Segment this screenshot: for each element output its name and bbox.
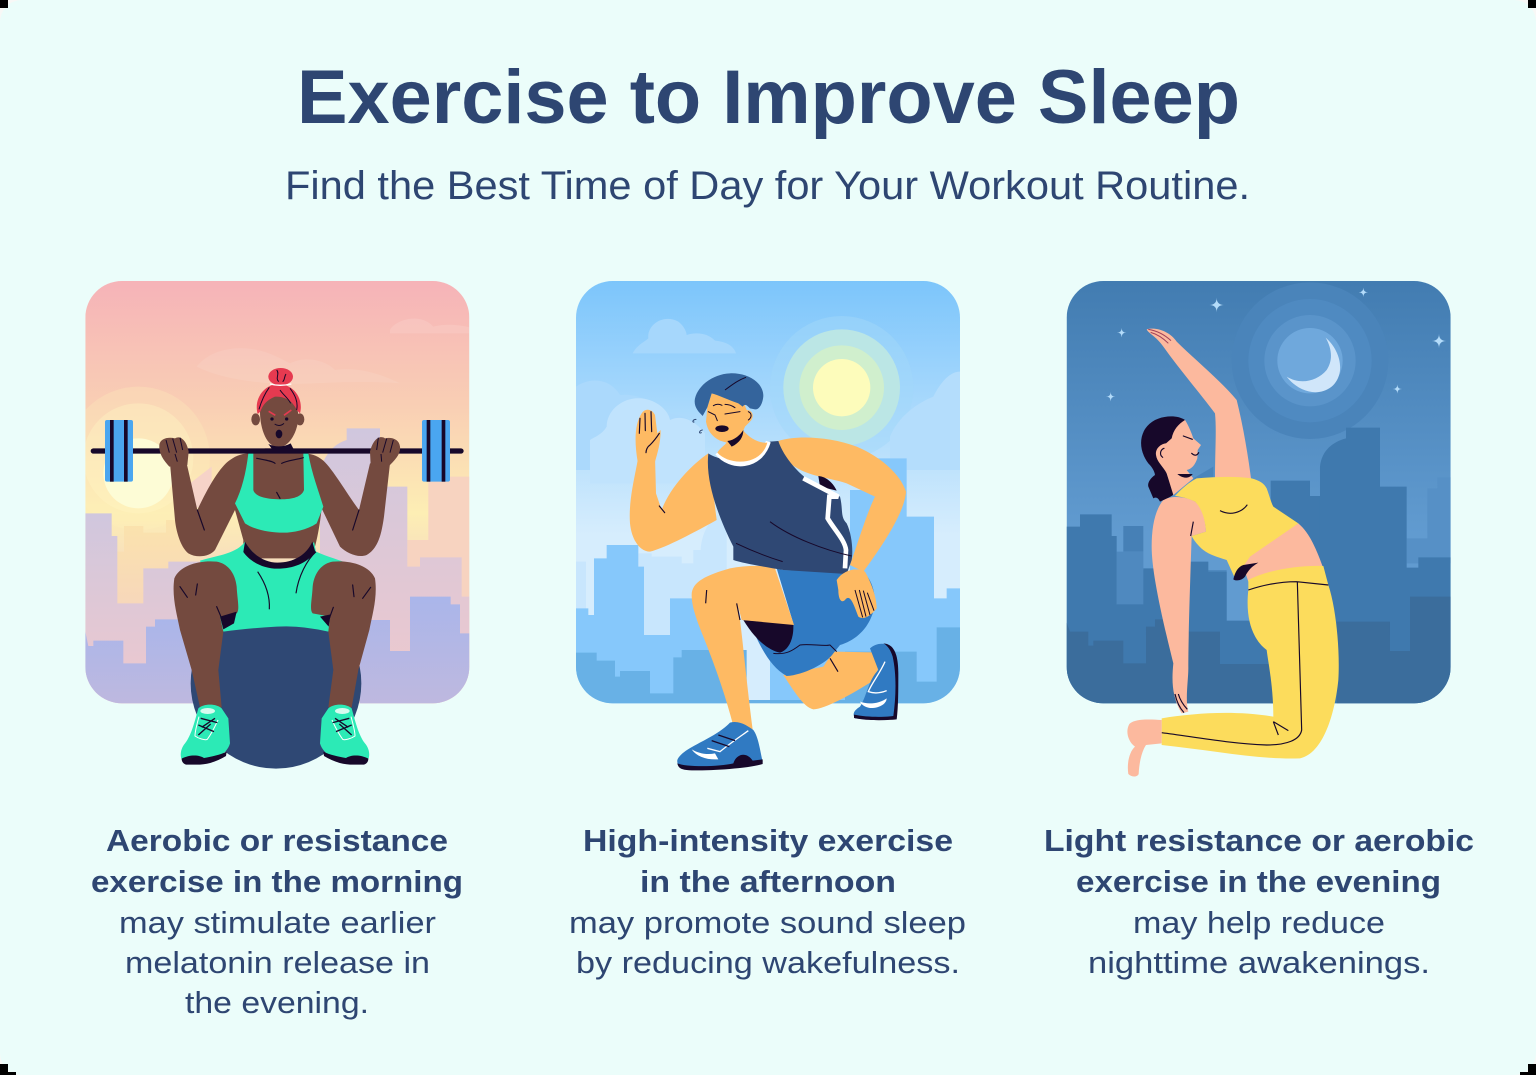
- right hand: [370, 437, 400, 467]
- panel: afternoon illustration: [576, 281, 960, 770]
- lowered arm: [1152, 497, 1206, 713]
- front leg: [692, 566, 794, 729]
- fingers: [1148, 329, 1171, 343]
- shorts: [736, 560, 875, 676]
- shirt folds: [736, 522, 852, 562]
- raised arm: [1147, 329, 1252, 483]
- foot: [1127, 719, 1162, 776]
- hip shadow: [1233, 563, 1258, 580]
- leggings seams: [1162, 582, 1328, 745]
- left ear: [251, 413, 260, 425]
- left hand: [159, 437, 189, 467]
- hair bun: [268, 368, 293, 385]
- face: [260, 395, 298, 447]
- caption: morning: the evening.: [185, 985, 369, 1020]
- caption: afternoon: High-intensity exercise: [583, 823, 953, 858]
- caption: morning: exercise in the morning: [91, 864, 463, 899]
- exercise ball: [191, 598, 361, 769]
- caption: evening: nighttime awakenings.: [1088, 945, 1430, 980]
- caption: evening: may help reduce: [1133, 905, 1385, 940]
- left weight plate: [105, 420, 133, 482]
- right arm: [778, 438, 906, 572]
- sports bra: [235, 453, 323, 533]
- caption: evening: [1044, 823, 1474, 980]
- neck shadow: [1177, 474, 1193, 478]
- left inner shorts: [220, 612, 237, 629]
- neck shadow: [268, 443, 293, 449]
- right leg: [311, 561, 376, 707]
- tank top: [708, 441, 852, 574]
- shorts creases: [258, 552, 316, 609]
- hand on thigh: [837, 569, 877, 618]
- side stripe: [803, 478, 846, 568]
- belly: [1240, 523, 1323, 582]
- eyes: [270, 417, 288, 421]
- caption: afternoon: in the afternoon: [640, 864, 896, 899]
- evening sky scene: [1067, 281, 1451, 703]
- barbell bar: [93, 443, 461, 459]
- hair line: [725, 377, 746, 390]
- morning sky scene: [67, 281, 469, 703]
- afternoon sky scene: [576, 281, 960, 703]
- caption: evening: exercise in the evening: [1076, 864, 1441, 899]
- raised arm: [630, 453, 717, 552]
- left leg: [174, 561, 238, 707]
- right inner shorts: [320, 614, 331, 627]
- armpit shadow: [818, 476, 837, 491]
- leggings: [1162, 566, 1339, 759]
- corner mark: top left: [0, 0, 8, 8]
- caption: afternoon: [569, 823, 966, 980]
- face and neck: [706, 393, 767, 462]
- right ear: [296, 413, 304, 425]
- left shoe: [181, 705, 230, 765]
- waistband: [243, 542, 315, 569]
- woman stretching: [1127, 329, 1339, 776]
- inner shorts: [743, 620, 793, 653]
- title: Exercise to Improve Sleep: [297, 55, 1240, 140]
- facial features: [1161, 436, 1199, 457]
- torso and arms: [170, 448, 390, 558]
- mouth: [276, 430, 282, 438]
- shorts seam: [773, 645, 837, 654]
- brows: [269, 410, 291, 415]
- collar: [717, 442, 768, 464]
- raised hand: [636, 410, 665, 513]
- head: [693, 373, 767, 462]
- eyes and brows: [708, 404, 751, 421]
- right shoe: [320, 705, 369, 765]
- crop top: [1175, 477, 1298, 578]
- hair band: [270, 384, 291, 385]
- corner mark: top right: [1528, 0, 1536, 8]
- hair: [695, 373, 763, 416]
- neck shadow: [727, 430, 743, 447]
- knee and arm lines: [180, 458, 371, 618]
- subtitle: Find the Best Time of Day for Your Workout Routine.: [285, 164, 1250, 208]
- caption: afternoon: may promote sound sleep: [569, 905, 966, 940]
- man lunging: [630, 373, 906, 770]
- corner mark: bottom left: [0, 1064, 16, 1075]
- woman lifting barbell on ball: [93, 368, 461, 765]
- caption: afternoon: by reducing wakefulness.: [576, 945, 960, 980]
- caption: morning: Aerobic or resistance: [106, 823, 448, 858]
- nose: [275, 423, 284, 426]
- hand lines: [1175, 522, 1193, 713]
- back shoe: [854, 643, 898, 720]
- corner mark: bottom right: [1520, 1064, 1536, 1075]
- right weight plate: [422, 420, 450, 482]
- head: [251, 368, 304, 449]
- hair strands: [259, 370, 297, 410]
- shorts: [200, 542, 352, 632]
- hair: [257, 384, 301, 414]
- caption: morning: may stimulate earlier: [119, 905, 436, 940]
- caption: morning: [91, 823, 463, 1020]
- breath marks: [693, 419, 702, 433]
- front shoe: [677, 722, 763, 770]
- back leg: [783, 652, 887, 709]
- knee lines: [706, 590, 838, 672]
- mouth: [715, 425, 729, 432]
- caption: evening: Light resistance or aerobic: [1044, 823, 1474, 858]
- panel: morning illustration: [67, 281, 469, 769]
- face: [1156, 420, 1201, 495]
- top crease: [1220, 505, 1247, 513]
- caption: morning: melatonin release in: [125, 945, 430, 980]
- panel: evening illustration: [1067, 281, 1451, 776]
- hair: [1141, 416, 1185, 502]
